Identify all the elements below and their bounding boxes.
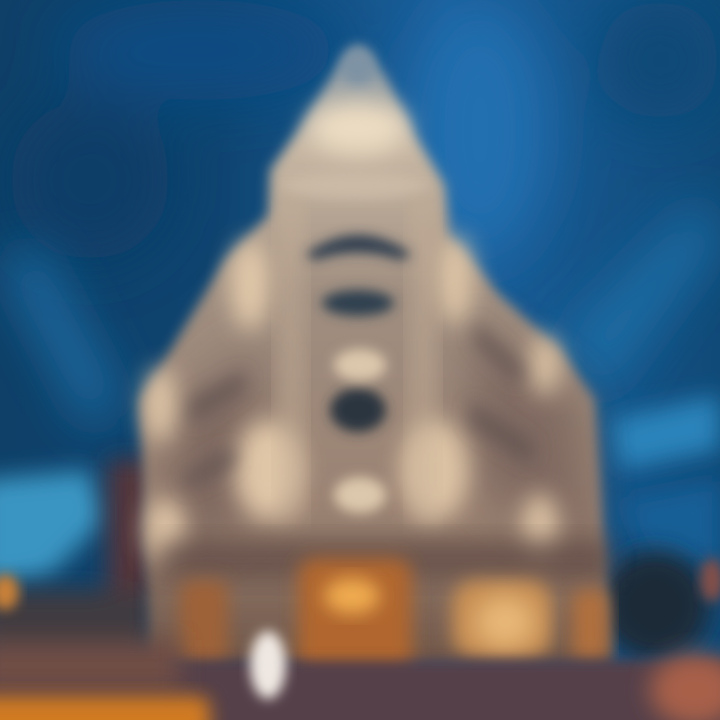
white light at entrance [250,631,286,699]
wing shading [170,320,590,560]
glowing right doorway [452,580,552,658]
left wing light bands [144,240,302,562]
glowing central doorway [298,558,412,680]
glowing left doorway [180,580,228,665]
dark street silhouettes [0,460,710,660]
building silhouette [140,46,612,665]
upper tier [281,171,429,199]
wing dark window bands [185,320,535,490]
spire top [340,46,376,86]
small orange light at left edge [0,574,19,610]
sky band right [610,395,720,470]
building [140,46,612,680]
right wing light bands [401,235,560,557]
small red light at right edge [700,558,720,602]
central dark windows [305,235,412,432]
sky streaks [0,200,720,430]
left street wash [0,640,180,690]
far right glow [572,590,608,660]
base dark band [160,540,610,580]
central column light right [412,200,434,520]
dome highlight [308,102,408,154]
central column light [280,200,302,520]
right street glow [650,654,720,720]
sky band lower right [620,480,720,565]
central light panels [334,349,386,513]
sky highlight: lower left glow [0,470,105,585]
foreground street [0,558,720,720]
orange light left foreground [0,696,210,720]
